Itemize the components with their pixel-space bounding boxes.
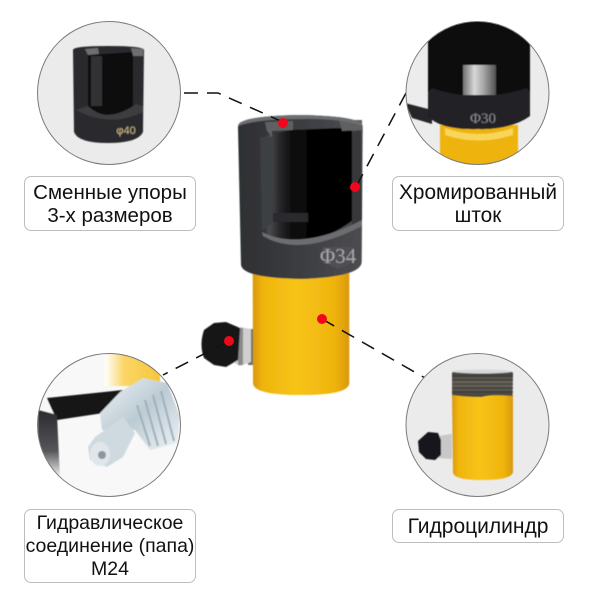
- label: hydraulic connection: [24, 509, 196, 583]
- yellow cylinder: [253, 272, 349, 395]
- main product: hydraulic cylinder with sleeve: [202, 115, 363, 395]
- label: hydraulic cylinder: [392, 509, 564, 543]
- label: replaceable stops: Сменные упоры: [33, 180, 187, 204]
- sleeve top lugs: [265, 121, 293, 137]
- black sleeve: Φ34: [320, 244, 357, 268]
- inset circle: replaceable sleeve: φ40: [116, 125, 136, 137]
- label: chrome rod: [392, 176, 564, 231]
- inset circle: replaceable sleeve: [38, 22, 180, 164]
- label: hydraulic connection: Гидравлическое: [37, 512, 183, 534]
- sleeve size mark: [322, 247, 354, 269]
- inset circle: hydraulic connection: [38, 350, 180, 496]
- dashed leader lines: [163, 93, 425, 378]
- label: chrome rod: шток: [455, 204, 501, 226]
- hydraulic fitting: [202, 322, 254, 367]
- label: hydraulic cylinder: Гидроцилиндр: [408, 514, 548, 538]
- label: hydraulic connection: М24: [91, 558, 129, 580]
- black sleeve: [238, 115, 363, 279]
- sleeve window: [260, 128, 352, 243]
- label: replaceable stops: 3-х размеров: [47, 204, 173, 226]
- label: replaceable stops: [24, 176, 196, 231]
- red marker dots: [224, 118, 360, 346]
- inset circle: chrome rod: [405, 15, 549, 170]
- label: chrome rod: Хромированный: [399, 180, 557, 204]
- inset circle: chrome rod: Φ30: [470, 111, 496, 127]
- label: hydraulic connection: соединение (папа): [26, 534, 194, 556]
- inset circle: hydraulic cylinder: [406, 354, 549, 496]
